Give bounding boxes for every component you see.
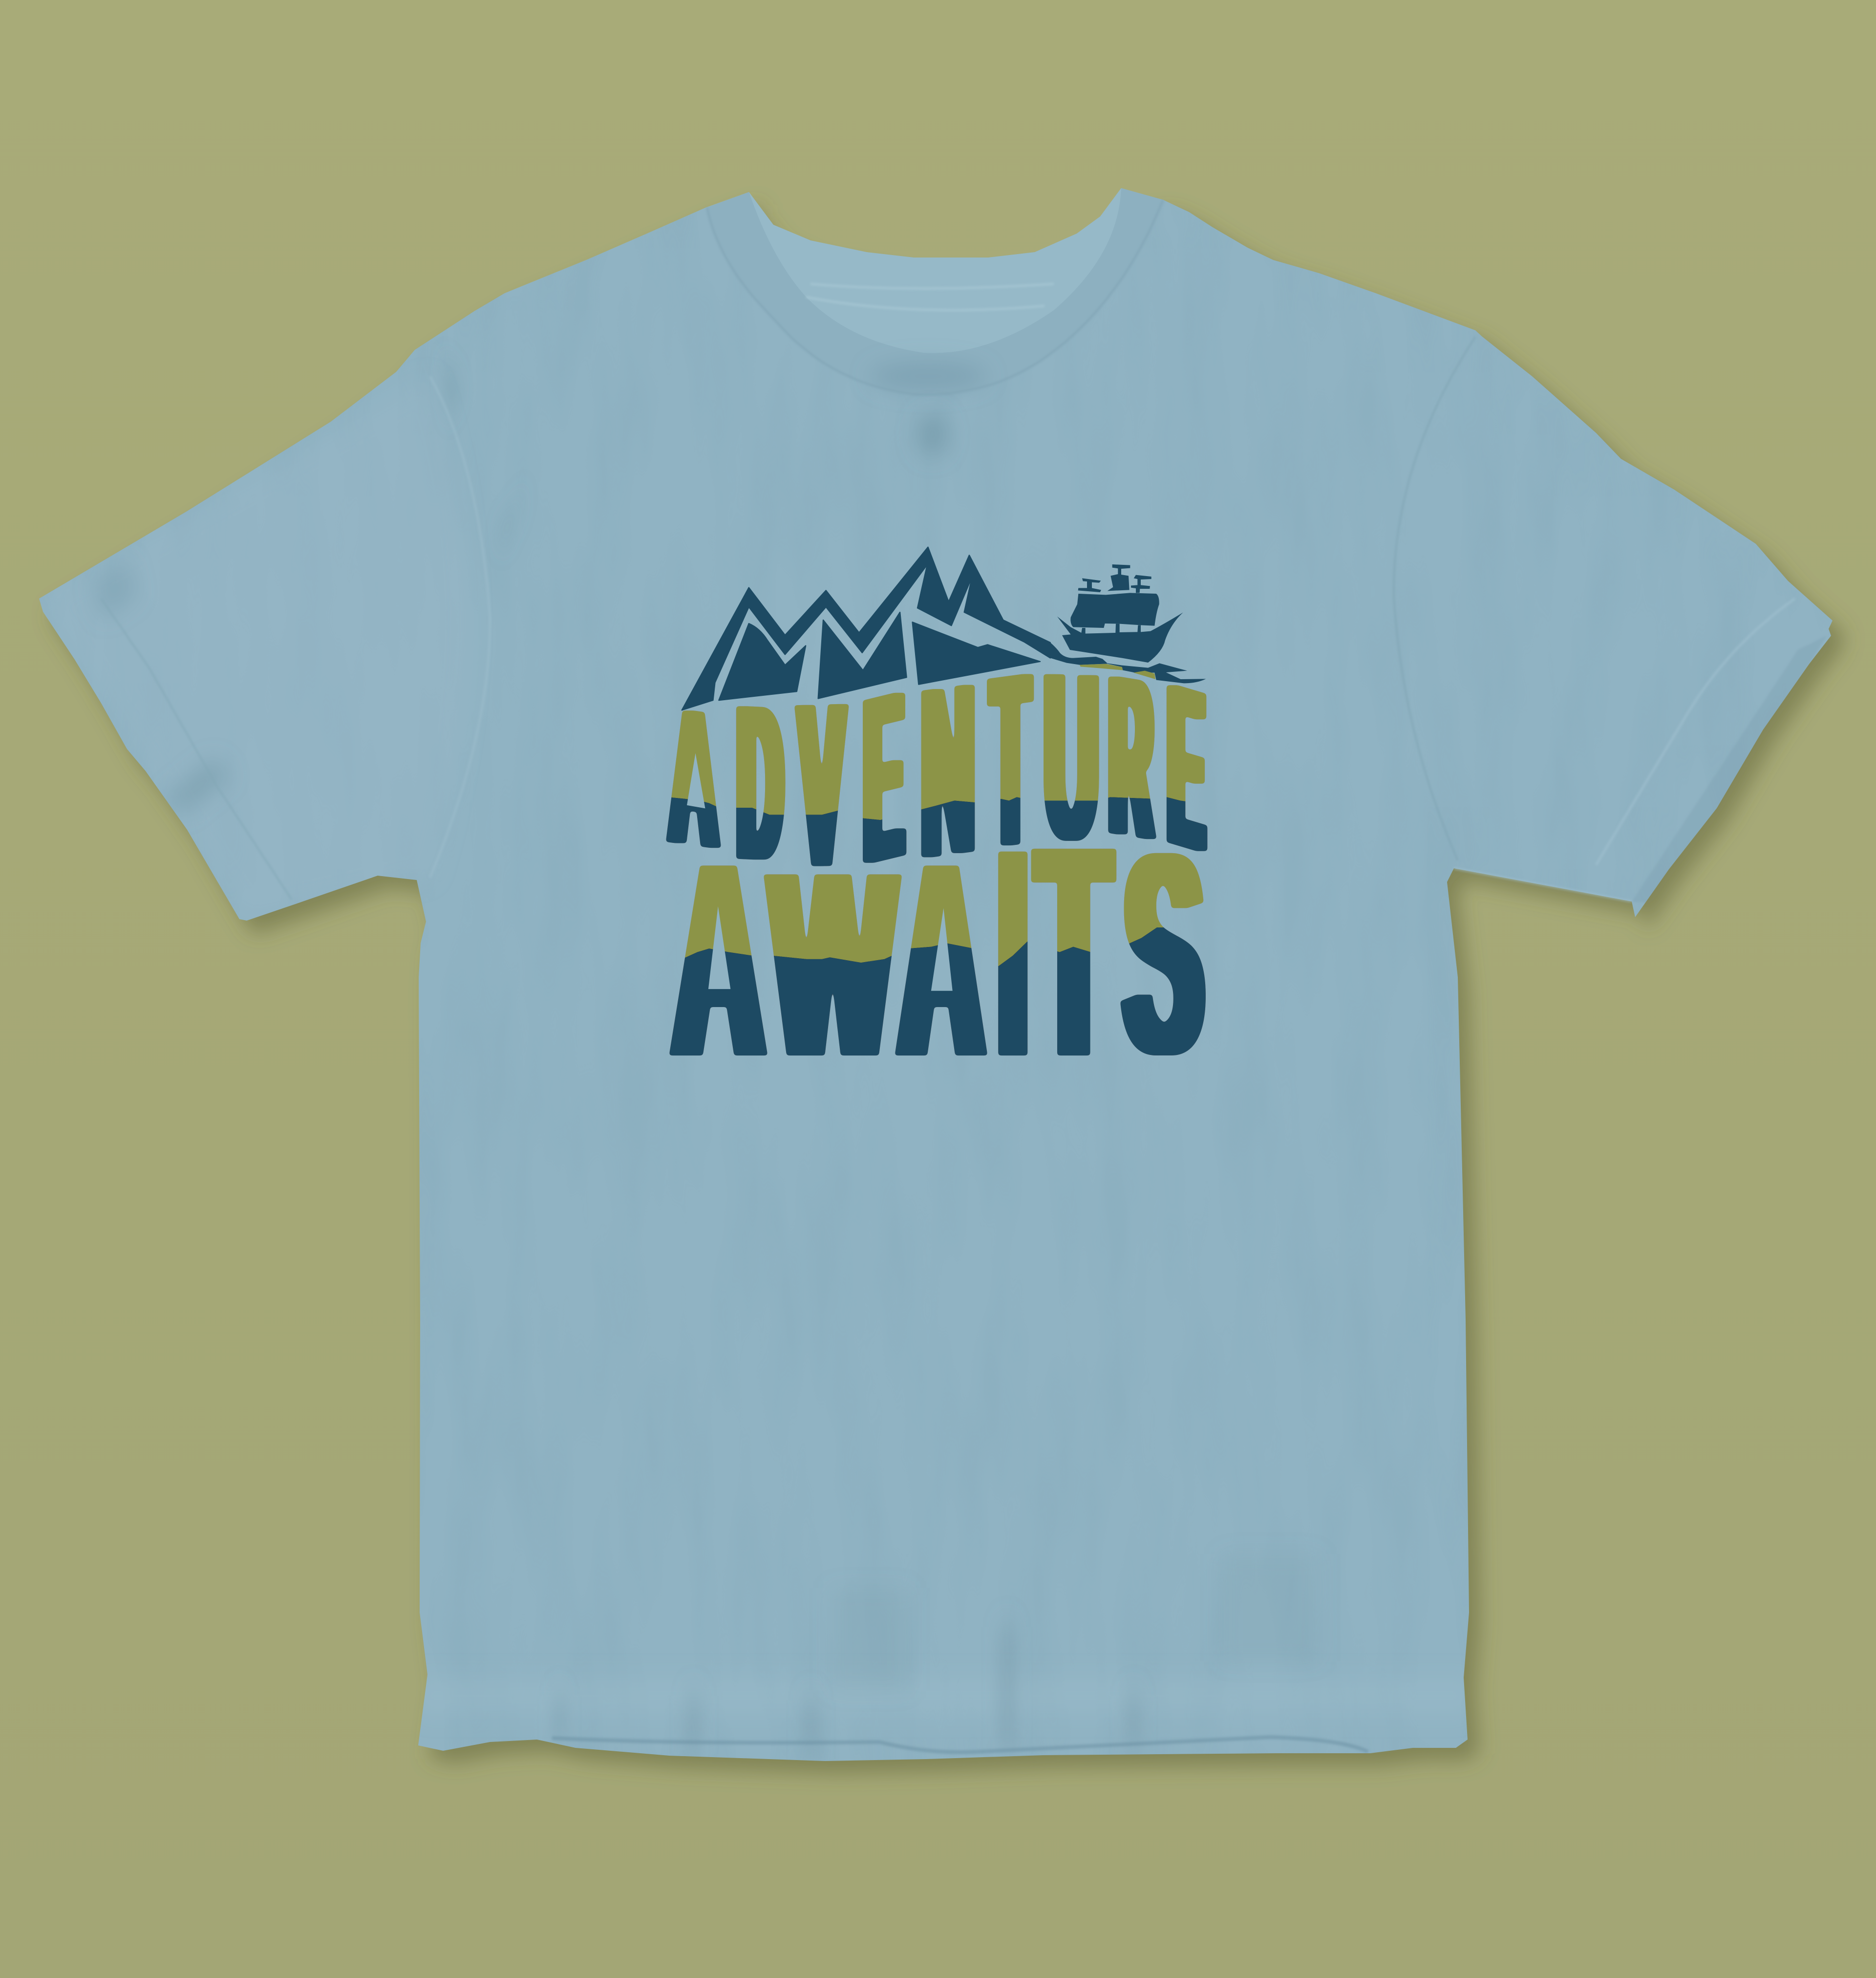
waves bbox=[1050, 643, 1206, 683]
hull bbox=[1057, 612, 1183, 663]
letters: adventure: T bbox=[992, 622, 1029, 900]
inner neck bbox=[749, 188, 1121, 353]
letters: adventure: A bbox=[670, 666, 717, 889]
letters: adventure: R bbox=[1110, 627, 1152, 887]
letters: adventure: N bbox=[922, 632, 974, 909]
letters: awaits: A bbox=[900, 806, 982, 1114]
letters: awaits: A bbox=[674, 807, 763, 1114]
letters: adventure: E bbox=[865, 642, 903, 914]
left sleeve tint bbox=[321, 876, 397, 895]
olive wave highlight left bbox=[1080, 664, 1123, 670]
letters: adventure: E bbox=[1169, 635, 1204, 900]
right sleeve stitch bbox=[1596, 599, 1795, 865]
olive upper colour band bbox=[635, 662, 1219, 966]
letters: awaits: S bbox=[1125, 795, 1202, 1113]
mountain ridge outline bbox=[682, 547, 1050, 710]
letters: awaits: W bbox=[771, 817, 895, 1111]
collar seam bbox=[707, 200, 1163, 395]
left sleeve stitch bbox=[101, 599, 292, 900]
letters: adventure: V bbox=[799, 653, 844, 916]
collar centre shade bbox=[870, 362, 987, 391]
letters: awaits: I bbox=[1000, 787, 1025, 1118]
left flag bbox=[1078, 578, 1101, 592]
middle inner peak bbox=[818, 612, 907, 699]
hem fold line bbox=[552, 1737, 1368, 1752]
letters: adventure bbox=[670, 622, 1204, 916]
fabric shading bbox=[107, 375, 1786, 1755]
slogan lettering bbox=[635, 622, 1219, 1119]
middle flag bbox=[1108, 564, 1130, 591]
letter counters bbox=[687, 753, 953, 991]
left hem fold shadow bbox=[166, 757, 230, 816]
olive wave highlight right bbox=[1133, 671, 1155, 679]
underarm line bbox=[1454, 868, 1632, 902]
navy lower colour band bbox=[635, 796, 1219, 1063]
hem vertical streaks bbox=[552, 1627, 1143, 1759]
neck label seams bbox=[806, 284, 1054, 310]
left sleeve seam bbox=[430, 376, 490, 878]
left inner peak bbox=[719, 624, 806, 700]
left cuff shadow bbox=[93, 557, 137, 621]
letters: awaits: T bbox=[1038, 784, 1109, 1119]
chest crease bbox=[917, 412, 947, 456]
lower body soft creases bbox=[831, 1554, 1319, 1691]
sail bbox=[1070, 593, 1159, 628]
letters: adventure: U bbox=[1045, 623, 1098, 890]
ship and waves bbox=[1050, 564, 1206, 683]
shirt body bbox=[39, 188, 1833, 1761]
shirt shadow bbox=[51, 205, 1844, 1774]
left armhole creases bbox=[442, 362, 530, 542]
hem band light bbox=[420, 1686, 1468, 1705]
right flag bbox=[1131, 575, 1151, 593]
right inner peak bbox=[913, 622, 1040, 685]
letters: adventure: D bbox=[738, 659, 782, 908]
collar band bbox=[707, 188, 1163, 395]
mountains bbox=[682, 547, 1050, 710]
right sleeve lower fold bbox=[1632, 635, 1827, 904]
letters: awaits bbox=[674, 784, 1202, 1119]
right sleeve seam bbox=[1394, 337, 1475, 860]
